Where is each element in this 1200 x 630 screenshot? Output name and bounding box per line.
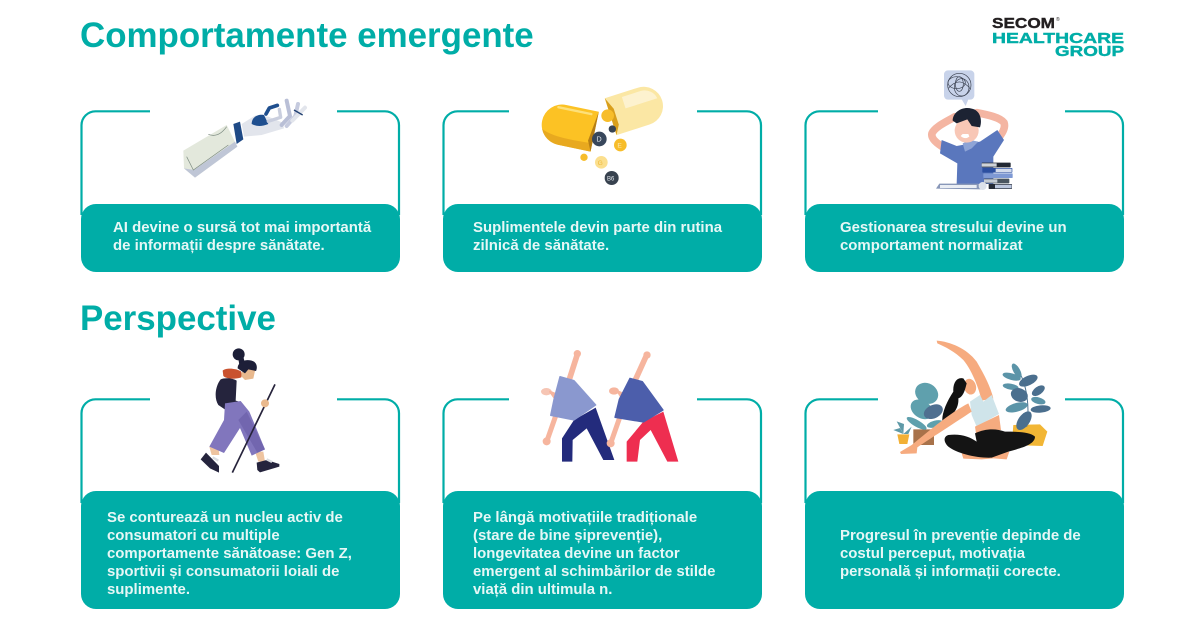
logo: Secom Healthcare Group <box>992 15 1124 60</box>
text bar: (stare de bine șiprevenție), <box>473 526 662 544</box>
icon: open capsule with vitamins <box>538 82 668 185</box>
text bar: comportamente sănătoase: Gen Z, <box>107 544 352 562</box>
logo: Secom Healthcare Group: HEALTHCARE <box>992 30 1124 47</box>
icon: open capsule with vitamins: E <box>617 143 622 150</box>
panel: supplements <box>442 86 762 272</box>
panel: active health consumers <box>80 348 400 609</box>
title: Comportamente emergente: Comportamente emergente <box>80 16 534 55</box>
icon: open capsule with vitamins: D <box>596 135 602 144</box>
icon: stressed man with books <box>932 70 1013 190</box>
text bar: Progresul în prevenție depinde de <box>840 526 1081 544</box>
text bar <box>81 204 400 272</box>
logo: Secom Healthcare Group: GROUP <box>1055 43 1124 60</box>
text bar: personală și informații corecte. <box>840 562 1061 580</box>
text bar: Suplimentele devin parte din rutina <box>473 218 722 236</box>
text bar: suplimente. <box>107 580 190 598</box>
icon: open capsule with vitamins: G <box>598 160 603 167</box>
panel: AI as health information source <box>80 98 400 272</box>
title: Perspective: Perspective <box>80 299 276 338</box>
text bar: zilnică de sănătate. <box>473 236 609 254</box>
text bar: comportament normalizat <box>840 236 1023 254</box>
panel: longevity as motivation <box>442 350 762 609</box>
text bar: emergent al schimbărilor de stilde <box>473 562 715 580</box>
text bar <box>805 491 1124 609</box>
icon: two people stretching <box>541 350 678 462</box>
text bar: consumatori cu multiple <box>107 526 280 544</box>
icon: open capsule with vitamins: B6 <box>607 176 615 182</box>
text bar <box>81 491 400 609</box>
text bar: AI devine o sursă tot mai importantă <box>113 218 371 236</box>
text bar <box>805 204 1124 272</box>
text bar: longevitatea devine un factor <box>473 544 680 562</box>
text bar <box>443 204 762 272</box>
icon: hiker <box>201 348 279 473</box>
text bar: Se conturează un nucleu activ de <box>107 508 343 526</box>
logo: Secom Healthcare Group: SECOM <box>992 15 1055 32</box>
text bar: sportivii și consumatorii loiali de <box>107 562 339 580</box>
text bar: Pe lângă motivațiile tradiționale <box>473 508 697 526</box>
text bar: Gestionarea stresului devine un <box>840 218 1067 236</box>
text bar: costul perceput, motivația <box>840 544 1025 562</box>
panel: stress management <box>804 70 1124 272</box>
panel: progress in prevention <box>804 340 1124 609</box>
text bar: de informații despre sănătate. <box>113 236 325 254</box>
text bar <box>443 491 762 609</box>
icon: yoga woman with plants <box>893 341 1051 459</box>
icon: robotic arm <box>183 101 305 178</box>
logo: Secom Healthcare Group: ® <box>1056 16 1060 23</box>
text bar: viață din ultimula n. <box>473 580 612 598</box>
